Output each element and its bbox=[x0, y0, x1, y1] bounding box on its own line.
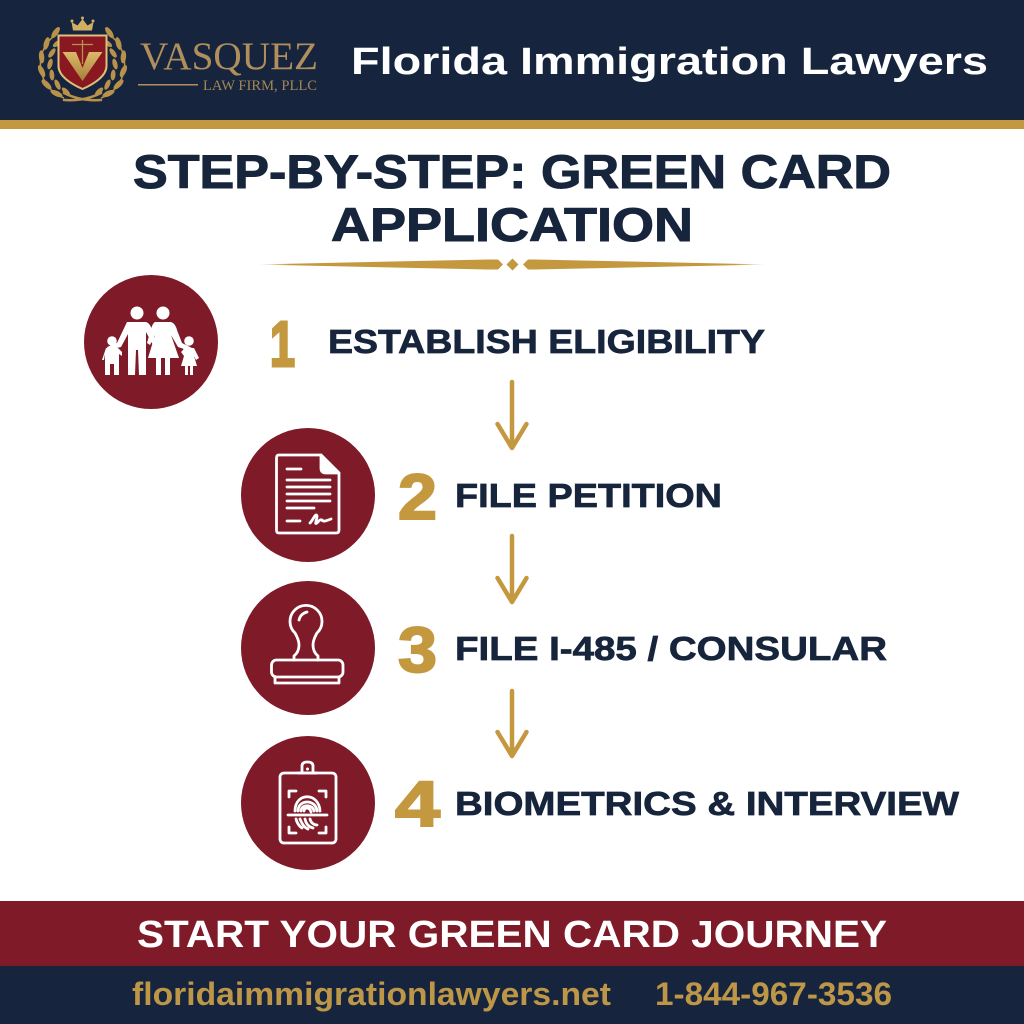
contact footer bbox=[0, 966, 1024, 1024]
step 3 bbox=[241, 581, 887, 715]
father bbox=[107, 306, 156, 375]
phone: 1-844-967-3536 bbox=[655, 976, 892, 1012]
icon: crown bbox=[70, 16, 94, 30]
logo subtitle: LAW FIRM, PLLC bbox=[203, 78, 317, 94]
number 3: 3 bbox=[398, 614, 437, 686]
step 2 bbox=[241, 428, 722, 562]
icon: family bbox=[84, 275, 218, 409]
number 1: 1 bbox=[270, 308, 295, 380]
main title: STEP-BY-STEP: GREEN CARD bbox=[133, 145, 891, 198]
label 2: FILE PETITION bbox=[455, 477, 722, 514]
label 3: FILE I-485 / CONSULAR bbox=[455, 630, 887, 667]
main title bbox=[133, 145, 891, 251]
label 1: ESTABLISH ELIGIBILITY bbox=[328, 323, 765, 360]
title divider bbox=[255, 258, 769, 270]
header band bbox=[0, 0, 1024, 129]
step 1 bbox=[84, 275, 765, 409]
icon: fingerprint clipboard bbox=[241, 736, 375, 870]
number 4: 4 bbox=[395, 768, 441, 840]
arrow 3 to 4 bbox=[498, 691, 526, 756]
arrow 2 to 3 bbox=[498, 536, 526, 602]
icon: laurel wreath bbox=[36, 26, 129, 100]
icon: document bbox=[241, 428, 375, 562]
logo rule bbox=[138, 84, 198, 86]
mother bbox=[147, 306, 194, 375]
call to action band bbox=[0, 901, 1024, 966]
number 2: 2 bbox=[398, 461, 437, 533]
logo wordmark: VASQUEZ bbox=[140, 35, 318, 78]
call to action band: START YOUR GREEN CARD JOURNEY bbox=[137, 914, 887, 956]
child right bbox=[181, 336, 199, 375]
icon: shield bbox=[58, 36, 106, 89]
logo: Vasquez Law Firm bbox=[36, 16, 318, 100]
label 4: BIOMETRICS & INTERVIEW bbox=[455, 785, 960, 822]
main title: APPLICATION bbox=[331, 198, 693, 251]
child left bbox=[102, 336, 122, 375]
arrow 1 to 2 bbox=[498, 382, 526, 448]
icon: stamp bbox=[241, 581, 375, 715]
website: floridaimmigrationlawyers.net bbox=[132, 976, 611, 1012]
header title: Florida Immigration Lawyers bbox=[351, 41, 988, 83]
step 4 bbox=[241, 736, 960, 870]
